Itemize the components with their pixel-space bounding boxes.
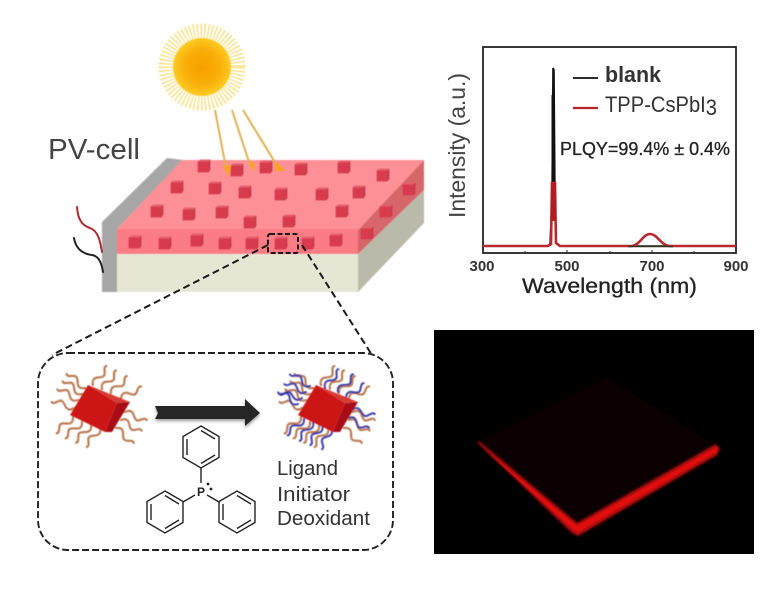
text: ligand roles: Deoxidant bbox=[277, 508, 370, 530]
x ticks bbox=[525, 250, 694, 253]
quantum dots bbox=[128, 160, 416, 250]
perovskite side face bbox=[358, 160, 424, 254]
x tick labels: 900 bbox=[723, 258, 749, 275]
substrate side bbox=[358, 190, 424, 292]
x tick labels: 300 bbox=[469, 258, 495, 275]
legend: blank bbox=[605, 62, 662, 87]
sun bbox=[166, 31, 238, 103]
plot frame bbox=[483, 47, 736, 253]
black spectrum bbox=[483, 68, 736, 246]
perovskite front face bbox=[117, 229, 358, 254]
chart: PL spectrum bbox=[444, 47, 749, 298]
red spectrum bbox=[483, 183, 736, 246]
text: ligand roles bbox=[277, 458, 370, 530]
legend: TPP-CsPbI bbox=[605, 92, 715, 117]
label: PV-cell: PV-cell bbox=[48, 134, 140, 166]
zoom indicator and dashed leader lines bbox=[52, 234, 372, 355]
perovskite top face bbox=[117, 160, 424, 230]
dashed rounded border bbox=[38, 353, 393, 550]
text: ligand roles: Ligand bbox=[277, 458, 338, 480]
x tick labels: 500 bbox=[554, 258, 580, 275]
x tick labels bbox=[469, 258, 749, 275]
black background bbox=[434, 330, 754, 554]
annotation: PLQY: PLQY=99.4% ± 0.4% bbox=[560, 139, 730, 159]
black lower band bbox=[552, 95, 555, 185]
photo: luminescent film bbox=[434, 330, 754, 554]
glowing edges bbox=[476, 441, 720, 536]
substrate bbox=[117, 254, 358, 292]
electrode bbox=[102, 158, 183, 292]
nanocrystal before bbox=[51, 365, 147, 448]
light rays bbox=[215, 110, 285, 177]
y axis label: Intensity (a.u.) bbox=[444, 73, 470, 218]
text: ligand roles: Initiator bbox=[277, 484, 350, 506]
triphenylphosphine structure bbox=[147, 426, 255, 533]
baseline band bbox=[628, 246, 673, 248]
wires bbox=[74, 207, 103, 272]
legend: 3 bbox=[706, 95, 717, 120]
triphenylphosphine structure: P bbox=[197, 485, 205, 499]
x tick labels: 700 bbox=[639, 258, 665, 275]
faint film surface bbox=[477, 377, 718, 530]
reaction arrow bbox=[155, 399, 260, 428]
legend bbox=[573, 62, 717, 120]
nanocrystal after bbox=[277, 365, 375, 450]
panel: ligand exchange bbox=[38, 353, 393, 550]
x axis label: Wavelength (nm) bbox=[522, 275, 697, 298]
PV cell slab bbox=[102, 158, 424, 292]
red peak fill bbox=[551, 183, 556, 221]
